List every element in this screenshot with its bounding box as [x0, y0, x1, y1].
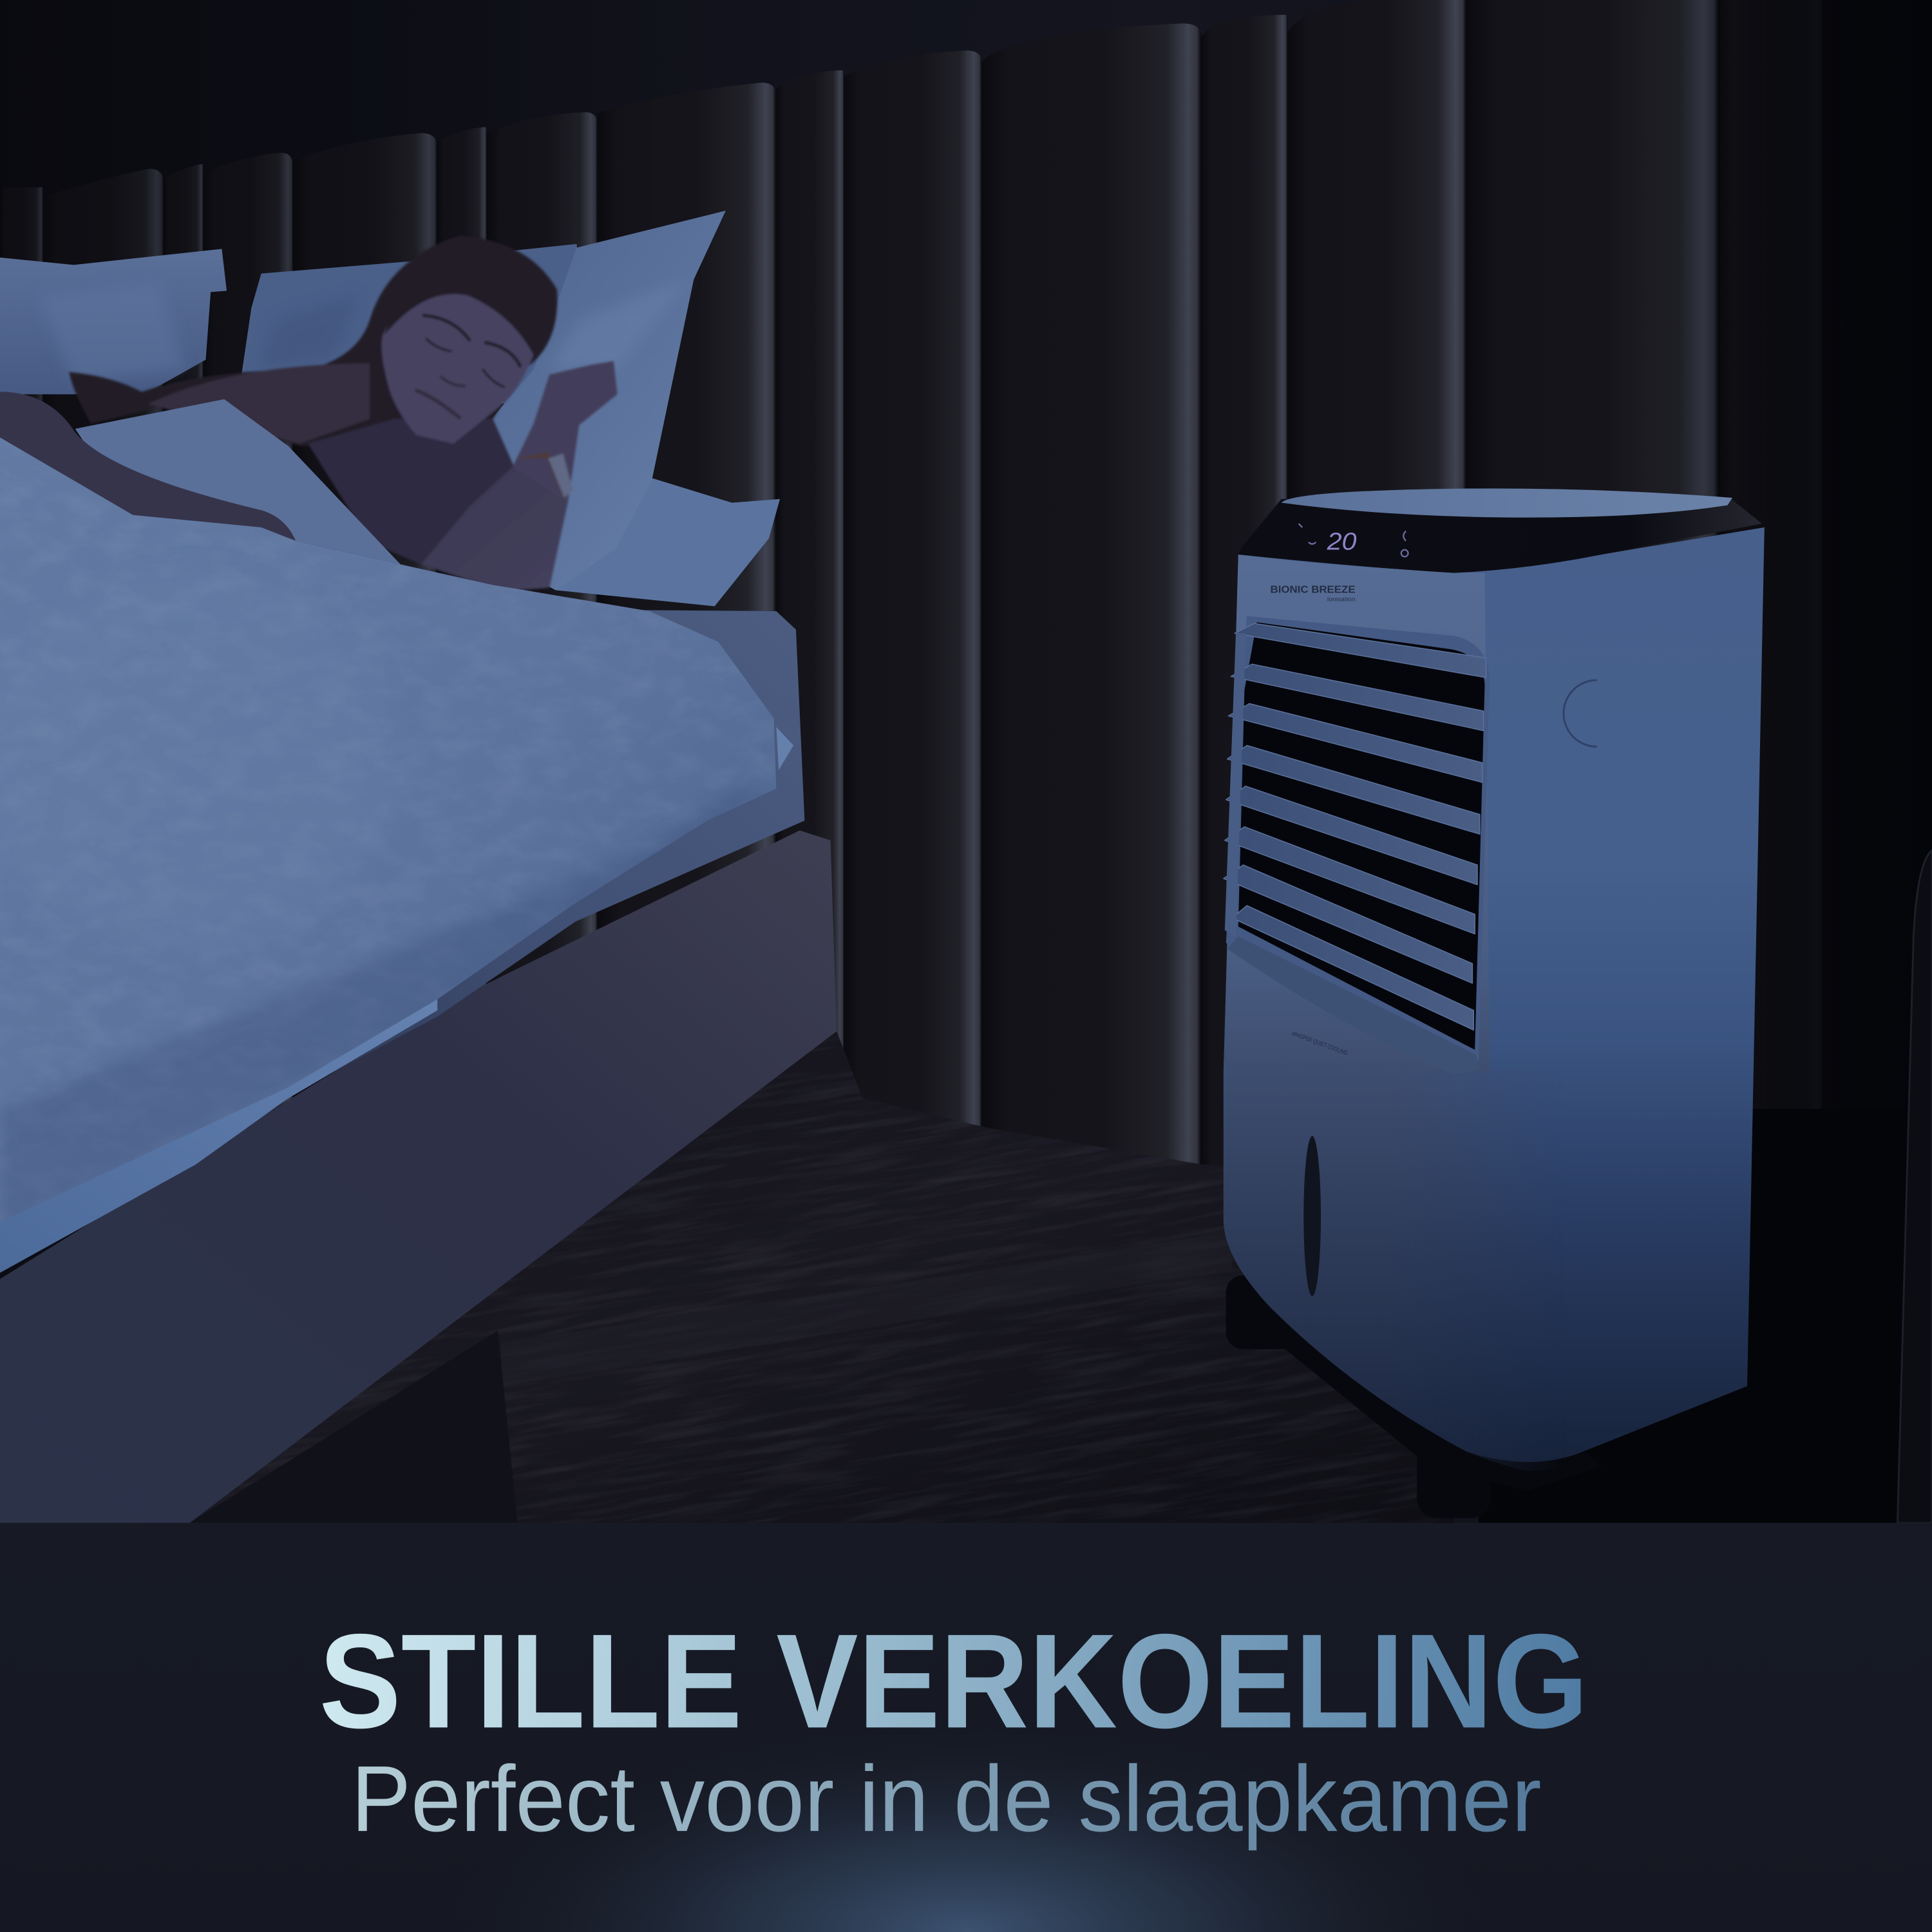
duvet fold [75, 399, 401, 564]
louvre slats [1224, 623, 1486, 1030]
facial features [417, 316, 520, 418]
louvre left strip [1225, 633, 1245, 936]
bed [0, 211, 837, 1523]
under sheet [0, 986, 437, 1273]
cooler upper front [1224, 554, 1490, 1072]
water level window [1303, 1136, 1321, 1296]
torso and neck [308, 419, 518, 591]
left arm [0, 392, 296, 541]
lower pillow [556, 478, 780, 606]
main pillow [428, 211, 726, 590]
leather headboard panels [0, 0, 1824, 1171]
top cap [1282, 488, 1732, 518]
display temperature: 20 [1327, 527, 1357, 555]
wooden floor [193, 1032, 1453, 1522]
duvet [0, 431, 793, 1232]
left pillow [0, 249, 227, 394]
upper arm [421, 467, 568, 591]
hair fringe [384, 269, 533, 355]
caption band [0, 1523, 1932, 1932]
cooler body side [1224, 527, 1765, 1462]
bottom glow [370, 1651, 1565, 1932]
display icons [1299, 524, 1408, 556]
air cooler [1224, 488, 1765, 1518]
louvre frame [1226, 616, 1490, 1072]
sleeping woman [69, 235, 618, 591]
hair [69, 235, 557, 446]
title: STILLE VERKOELING [319, 1606, 1588, 1756]
side button [1564, 680, 1597, 746]
wall background [0, 0, 1932, 1523]
forearm and fist [513, 361, 618, 502]
pillow soft folds [37, 277, 690, 382]
louvre lower lip [1227, 936, 1479, 1074]
louvre opening [1238, 622, 1484, 1050]
brand logo [1271, 584, 1356, 603]
brand logo: Ionisation [1327, 596, 1356, 603]
right dark floor and far-right object [1479, 850, 1932, 1523]
face [382, 286, 533, 444]
wheels and under-shadow [1226, 1275, 1602, 1518]
brand logo: BIONIC BREEZE [1271, 584, 1356, 595]
mattress [287, 610, 804, 1097]
small printed line: WHISPER QUIET COOLING [1291, 1030, 1349, 1057]
cooler lower front fading softly into the side [1224, 1070, 1534, 1471]
bed base [0, 831, 837, 1523]
black control band [1238, 499, 1762, 573]
subtitle: Perfect voor in de slaapkamer [351, 1746, 1541, 1851]
shaded ends of the wall [0, 0, 1932, 1523]
wrist watch [515, 452, 573, 500]
back pillow [240, 244, 579, 406]
